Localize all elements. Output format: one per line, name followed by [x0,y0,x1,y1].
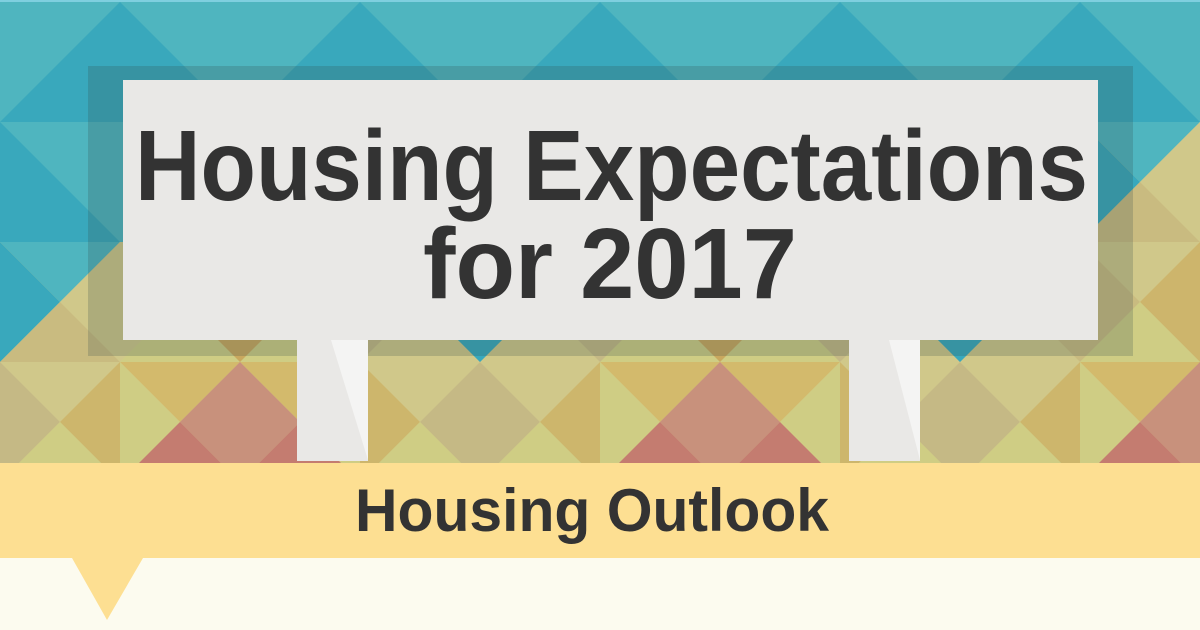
sign shadow panel [88,66,1133,356]
section banner with pointer [0,463,1200,620]
left sign post [297,338,368,461]
section heading: Housing Outlook [355,477,830,544]
title: Housing Expectations [135,110,1088,222]
title: for 2017 [423,208,797,320]
title [135,110,1088,320]
right sign post [849,338,920,461]
sign board [123,80,1098,340]
geometric triangle pattern background [0,0,1200,482]
